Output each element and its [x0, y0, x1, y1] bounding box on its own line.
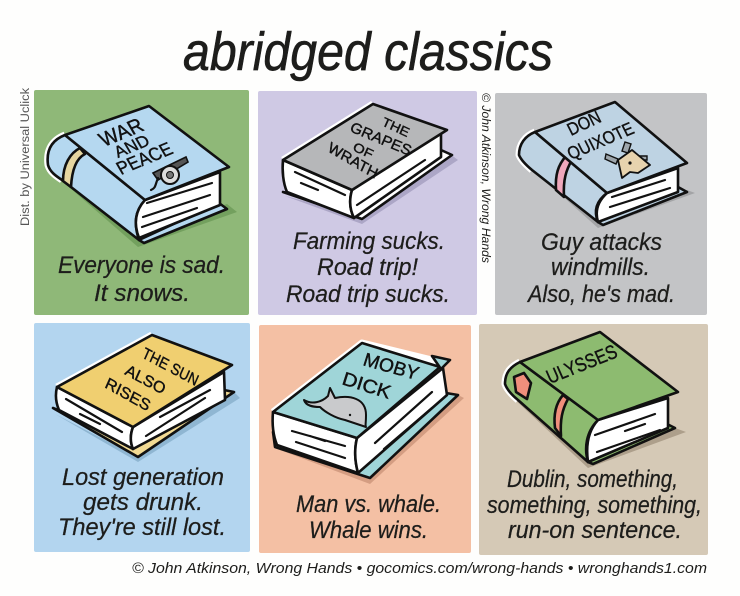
book: The Sun Also Rises: [53, 335, 240, 462]
caption: [286, 228, 450, 308]
panel: Moby Dick: [259, 325, 471, 553]
caption: Road trip sucks.: [286, 281, 450, 308]
book title: DON: [564, 107, 604, 140]
icon: cannon: [151, 157, 188, 190]
book title: [102, 345, 201, 415]
caption: It snows.: [94, 280, 190, 307]
caption: Lost generation: [62, 464, 224, 491]
book: War and Peace: PEACE: [113, 139, 177, 179]
caption: Road trip!: [317, 254, 418, 281]
panel background: [34, 323, 250, 552]
book title: MOBY: [361, 349, 422, 384]
book: The Grapes of Wrath: [283, 104, 458, 224]
caption: Also, he's mad.: [526, 281, 675, 308]
book: Ulysses: [505, 332, 686, 468]
panel: Ulysses: [479, 324, 708, 555]
book title: ULYSSES: [543, 341, 621, 389]
caption: Guy attacks: [541, 229, 662, 256]
caption: Whale wins.: [309, 517, 428, 544]
icon: whale: [304, 388, 366, 427]
book title: WRATH: [325, 140, 380, 183]
book title: OF: [351, 139, 376, 162]
icon: windmill: [605, 142, 650, 178]
book title: WAR: [95, 114, 148, 151]
panel: Don Quixote: [495, 93, 707, 315]
panel background: [34, 90, 249, 315]
title: abridged classics: [183, 22, 553, 82]
caption: They're still lost.: [58, 514, 226, 541]
panel: War and Peace: [34, 90, 249, 315]
caption: gets drunk.: [83, 489, 203, 516]
book: Don Quixote: QUIXOTE: [564, 118, 637, 164]
caption: Dublin, something,: [507, 466, 678, 493]
panel background: [259, 325, 471, 553]
caption: something, something,: [487, 492, 702, 519]
caption: Farming sucks.: [293, 228, 445, 255]
panel: The Sun Also Rises: [34, 323, 250, 552]
book: War and Peace: [48, 106, 237, 247]
book title: THE SUN: [139, 345, 201, 390]
book title: [325, 114, 414, 183]
book title: THE: [380, 114, 412, 140]
caption: [526, 229, 675, 308]
caption: [58, 464, 226, 541]
book: Moby Dick: DICK: [339, 369, 394, 404]
panel background: [258, 91, 477, 315]
panel: The Grapes of Wrath: [258, 91, 477, 315]
footer credit: © John Atkinson, Wrong Hands • gocomics.com/wrong-hands • wronghands1.com: [132, 560, 707, 577]
book: Don Quixote: [519, 102, 695, 228]
caption: [487, 466, 702, 544]
caption: Everyone is sad.: [58, 252, 225, 279]
panel background: [479, 324, 708, 555]
side credit: author: © John Atkinson, Wrong Hands: [479, 93, 491, 263]
book title: ALSO: [122, 362, 168, 398]
side credit: distributor: Dist. by Universal Uclick: [20, 88, 32, 226]
book title: GRAPES: [347, 120, 414, 159]
book title: RISES: [102, 375, 153, 415]
book: War and Peace: AND: [110, 131, 153, 161]
panel background: [495, 93, 707, 315]
caption: [296, 491, 441, 544]
caption: windmills.: [551, 254, 650, 281]
caption: Man vs. whale.: [296, 491, 441, 518]
caption: run-on sentence.: [508, 517, 682, 544]
caption: [58, 252, 225, 307]
book: Moby Dick: [273, 343, 464, 484]
